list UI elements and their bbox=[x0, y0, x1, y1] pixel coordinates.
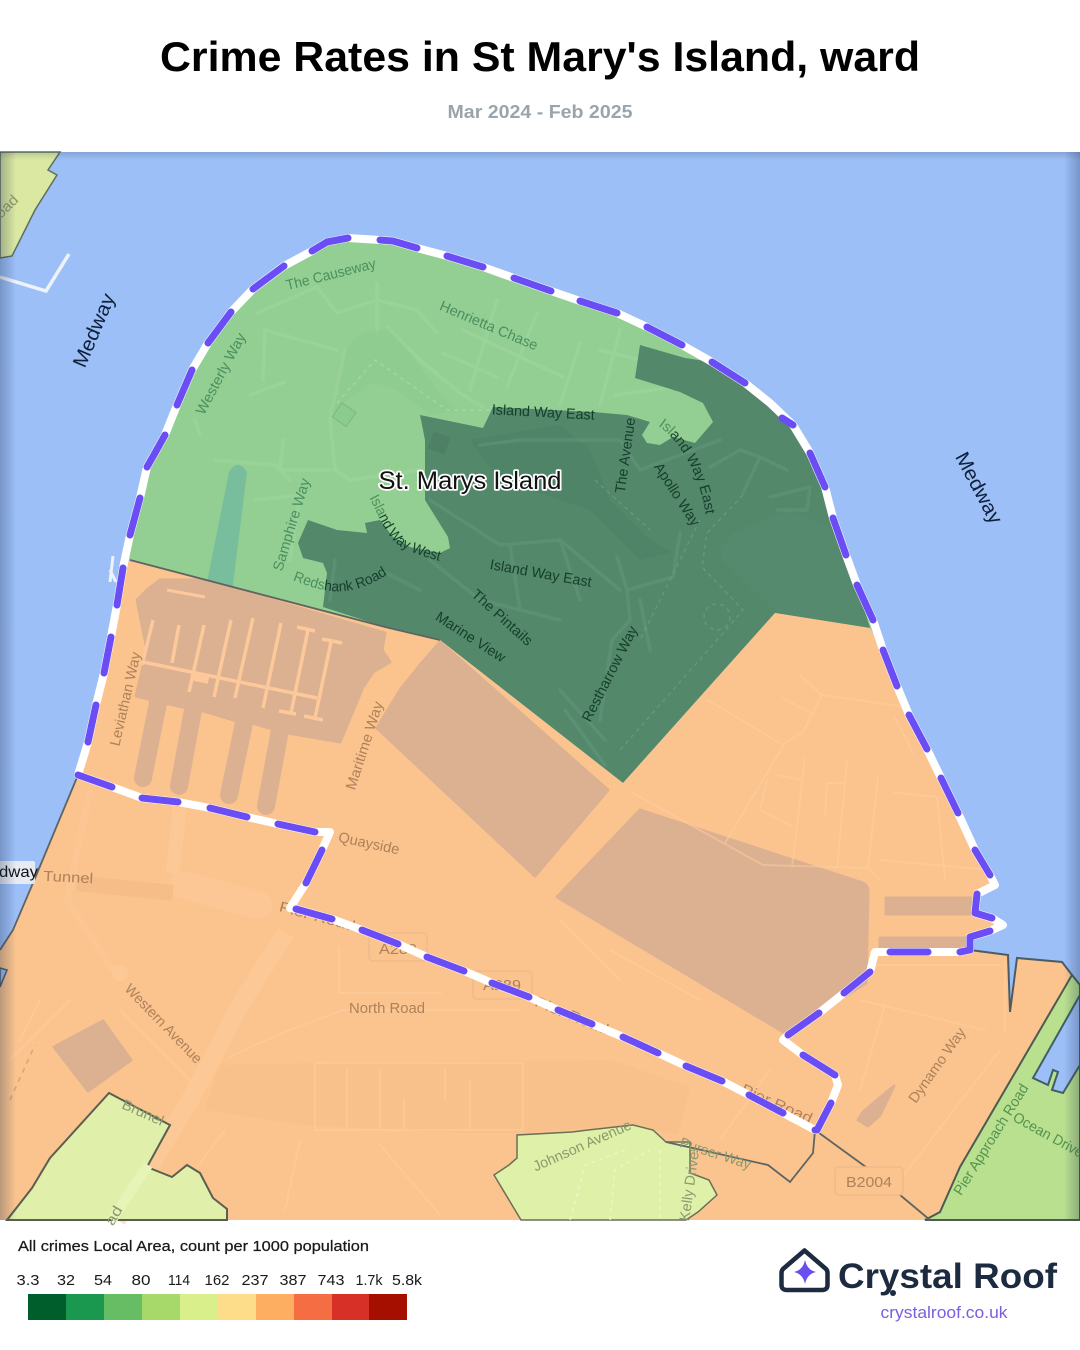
street labels: Samphire Way bbox=[270, 476, 314, 573]
street labels: B2004 bbox=[846, 1175, 892, 1191]
water inlet east bbox=[1033, 995, 1080, 1093]
area: orange south part of ward and surrounds bbox=[0, 560, 1072, 1220]
legend bbox=[16, 1238, 423, 1320]
legend values: 54 bbox=[94, 1272, 112, 1289]
legend values: 5.8k bbox=[392, 1272, 423, 1289]
sports pitch bbox=[206, 465, 247, 592]
street labels: Island Way East bbox=[489, 557, 593, 591]
street labels: The Avenue bbox=[613, 417, 639, 494]
logo: Crystal Roof bbox=[782, 1250, 1057, 1322]
street labels: A289 bbox=[483, 978, 521, 994]
dock: marina fingers bbox=[143, 703, 280, 806]
legend values: 80 bbox=[132, 1272, 150, 1289]
street labels: Pier Approach Road bbox=[951, 1081, 1032, 1198]
subtitle: date range: Mar 2024 - Feb 2025 bbox=[448, 102, 632, 122]
legend title: All crimes Local Area, count per 1000 population bbox=[18, 1238, 369, 1255]
dock: east channels bbox=[886, 898, 974, 914]
street labels: Pier Road bbox=[532, 994, 611, 1038]
street labels: Western Avenue bbox=[121, 981, 205, 1067]
street labels: Henrietta Chase bbox=[437, 298, 540, 354]
label: Medway east: Medway bbox=[950, 449, 1006, 528]
label: Medway west: Medway bbox=[69, 290, 120, 371]
dock: east block bbox=[557, 810, 868, 1033]
street labels: A289 bbox=[379, 942, 417, 958]
website: crystalroof.co.uk bbox=[880, 1304, 1008, 1322]
dock: small rotated square bbox=[54, 1021, 131, 1091]
road shields bbox=[369, 933, 903, 1195]
street labels: Purser Way bbox=[678, 1135, 754, 1173]
light green streets bbox=[195, 283, 690, 560]
legend colour scale bbox=[28, 1294, 407, 1320]
area: light green north part of ward bbox=[130, 238, 873, 650]
legend values: 743 bbox=[318, 1272, 344, 1289]
street labels: Redshank Road bbox=[294, 566, 386, 592]
water background bbox=[0, 152, 1080, 1220]
area: yellow-green south west bbox=[7, 1093, 227, 1220]
legend values: 387 bbox=[280, 1272, 306, 1289]
title: Crime Rates in St Mary's Island, ward bbox=[160, 33, 920, 80]
street labels: Quayside bbox=[337, 830, 401, 858]
street labels: Tunnel bbox=[43, 869, 94, 887]
street labels: Maritime Way bbox=[343, 699, 387, 792]
dark green detail and streets bbox=[330, 425, 870, 765]
dock: centre block bbox=[377, 642, 608, 876]
street labels: Marine View bbox=[432, 609, 509, 666]
area: green south east bbox=[925, 975, 1080, 1220]
street labels: Brunel bbox=[119, 1097, 166, 1130]
dock: marina basin bbox=[136, 580, 390, 742]
street labels: Island Way East bbox=[660, 418, 715, 514]
ward boundary bbox=[78, 238, 1003, 1130]
park area bbox=[330, 328, 457, 417]
legend values: 114 bbox=[168, 1272, 190, 1289]
icon: house with star bbox=[782, 1250, 828, 1290]
label: tunnel fragment: dway bbox=[0, 864, 38, 881]
orange streets bbox=[10, 675, 1005, 1220]
wordmark: Crystal Roof bbox=[838, 1257, 1057, 1296]
dock: Dynamo Way blob bbox=[858, 1086, 894, 1126]
map bbox=[0, 151, 1080, 1229]
street labels: Johnson Avenue bbox=[531, 1117, 634, 1175]
street labels: Dynamo Way bbox=[906, 1024, 970, 1106]
street labels: The Pintails bbox=[468, 587, 535, 649]
legend values: 1.7k bbox=[356, 1272, 383, 1289]
street labels: Leviathan Way bbox=[108, 650, 145, 748]
area: yellow-green south centre bbox=[494, 1125, 717, 1220]
street labels: Island Way East bbox=[491, 402, 595, 424]
street labels: Pier Road bbox=[739, 1082, 815, 1127]
wordmark descender dot bbox=[890, 1290, 896, 1296]
street labels: Island Way West bbox=[370, 494, 441, 561]
legend values: 237 bbox=[242, 1272, 268, 1289]
street labels: ad bbox=[103, 1203, 126, 1229]
yellow-green estate paths bbox=[570, 1150, 660, 1220]
legend values bbox=[16, 1272, 423, 1289]
map edge shadows bbox=[0, 152, 1080, 1220]
street labels bbox=[0, 192, 1080, 1269]
street labels: Westerly Way bbox=[193, 330, 250, 418]
white pier lines bbox=[0, 254, 69, 291]
boundary lines bbox=[0, 560, 930, 1220]
street labels: North Road bbox=[349, 1001, 425, 1017]
legend values: 162 bbox=[204, 1272, 230, 1289]
marina docks bbox=[54, 580, 974, 1126]
street labels: Restharrow Way bbox=[579, 623, 642, 725]
marina pontoons bbox=[142, 590, 342, 720]
street labels: Kelly Drive bbox=[677, 1151, 703, 1222]
legend values: 3.3 bbox=[16, 1272, 40, 1289]
place label: St. Marys Island: St. Marys Island bbox=[378, 467, 562, 495]
street labels: Pier Road bbox=[277, 899, 357, 935]
street labels: Apollo Way bbox=[650, 460, 703, 530]
area: dark green low crime part bbox=[298, 345, 870, 783]
area: top left land bbox=[0, 152, 60, 258]
street labels: The Causeway bbox=[284, 256, 378, 294]
legend values: 32 bbox=[57, 1272, 75, 1289]
